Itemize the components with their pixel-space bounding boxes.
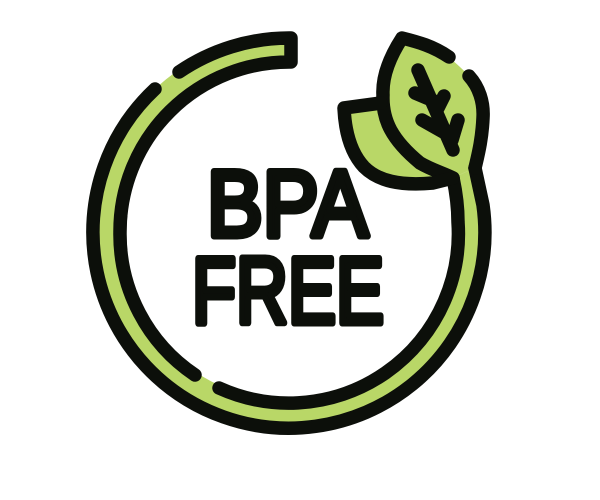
small leaf fill bbox=[343, 102, 455, 185]
bottom right inner arc and stem bbox=[219, 178, 458, 403]
leaf veins bbox=[415, 70, 458, 150]
big leaf outline bbox=[383, 38, 453, 178]
top arc outline with flat end bbox=[120, 38, 291, 375]
big leaf fill bbox=[384, 38, 483, 178]
green ring band bbox=[93, 36, 485, 428]
heading: FREE: FREE bbox=[192, 238, 384, 343]
small leaf outline bbox=[344, 103, 453, 184]
left and bottom outer arc bbox=[93, 89, 485, 428]
ring outer outline bbox=[93, 38, 485, 428]
big leaf right edge bbox=[469, 76, 483, 168]
heading: BPA: BPA bbox=[207, 151, 368, 256]
